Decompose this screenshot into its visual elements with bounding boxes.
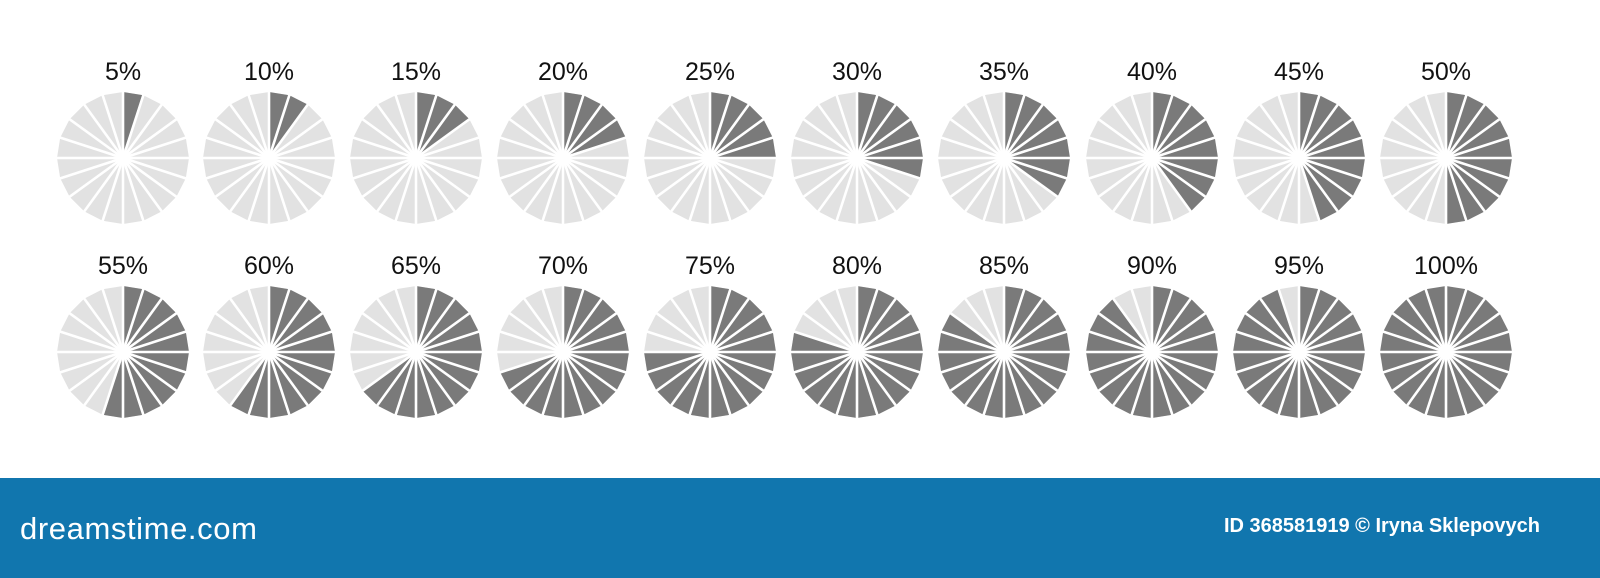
pie: 60%: 60% (244, 252, 294, 280)
pie: 85%: 85% (979, 252, 1029, 280)
pie: 95% (1229, 252, 1369, 422)
footer logo text: dreamstime.com (20, 511, 258, 546)
pie: 100%: 100% (1414, 252, 1478, 280)
pie: 25%: 25% (685, 58, 735, 86)
pie: 20%: 20% (538, 58, 588, 86)
pie: 30% (787, 58, 927, 228)
pie: 50%: 50% (1421, 58, 1471, 86)
pie: 60% (199, 252, 339, 422)
pie: 90% (1082, 252, 1222, 422)
pie: 55%: 55% (98, 252, 148, 280)
pie: 40%: 40% (1127, 58, 1177, 86)
pie: 100% (1376, 252, 1516, 422)
pie: 75% (640, 252, 780, 422)
pie: 90%: 90% (1127, 252, 1177, 280)
pie: 5% (53, 58, 193, 228)
pie: 75%: 75% (685, 252, 735, 280)
pie: 10% (199, 58, 339, 228)
pie: 40% (1082, 58, 1222, 228)
pie: 15%: 15% (391, 58, 441, 86)
pie: 30%: 30% (832, 58, 882, 86)
pie: 80%: 80% (832, 252, 882, 280)
footer bar (0, 478, 1600, 578)
pie: 85% (934, 252, 1074, 422)
pie: 70%: 70% (538, 252, 588, 280)
pie: 10%: 10% (244, 58, 294, 86)
pie: 35% (934, 58, 1074, 228)
pie: 45%: 45% (1274, 58, 1324, 86)
pie: 80% (787, 252, 927, 422)
pie: 95%: 95% (1274, 252, 1324, 280)
pie: 65% (346, 252, 486, 422)
pie: 65%: 65% (391, 252, 441, 280)
pie: 35%: 35% (979, 58, 1029, 86)
pie: 70% (493, 252, 633, 422)
footer credit: ID 368581919 © Iryna Sklepovych (1224, 515, 1540, 537)
pie: 25% (640, 58, 780, 228)
pie: 15% (346, 58, 486, 228)
pie: 50% (1376, 58, 1516, 228)
pie: 20% (493, 58, 633, 228)
pie: 55% (53, 252, 193, 422)
pie: 45% (1229, 58, 1369, 228)
pie: 5%: 5% (105, 58, 141, 86)
